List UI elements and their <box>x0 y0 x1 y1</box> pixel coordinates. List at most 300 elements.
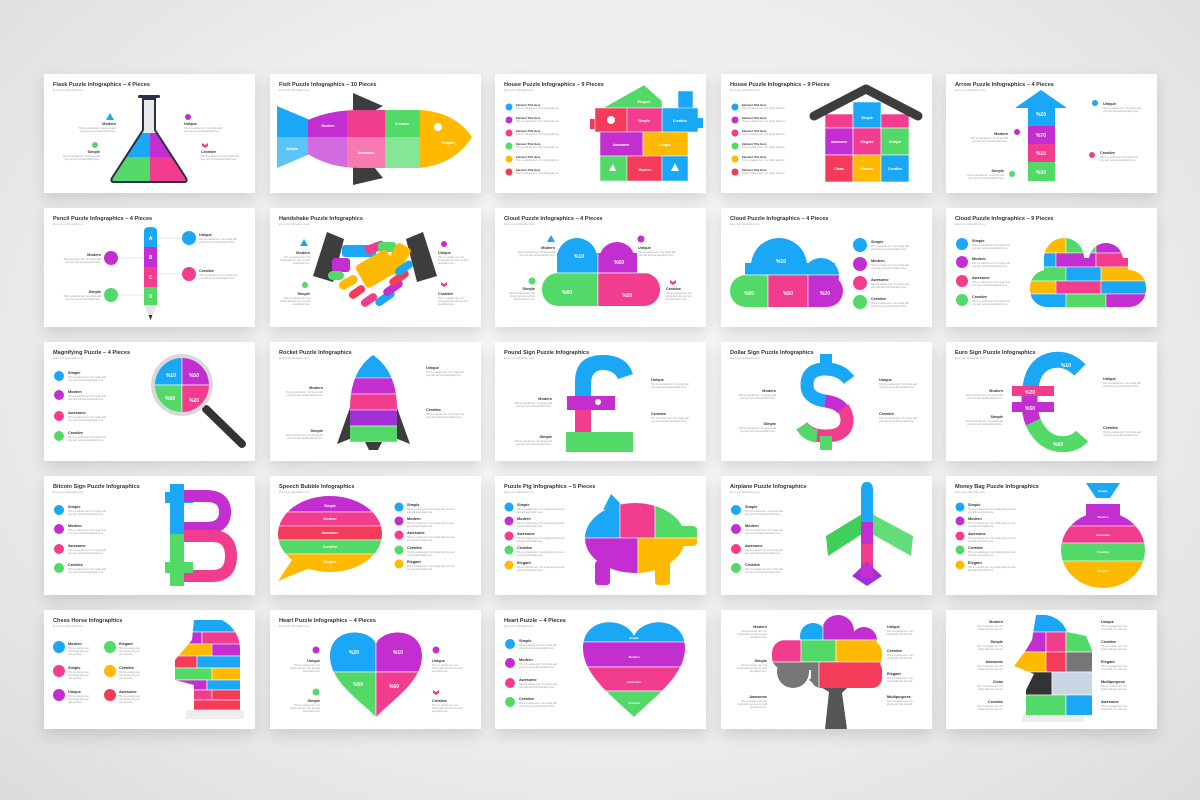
label: unique: This is a sample text. You simply add <box>651 383 689 386</box>
list: Modern <box>68 524 82 528</box>
list: This is a sample text. You simply add your own <box>968 508 1016 511</box>
title <box>504 484 595 494</box>
house grid graphic: Modern <box>861 167 873 171</box>
label: modern: your own text and description here. <box>967 397 1003 400</box>
right labels: simply add your own text <box>887 680 913 683</box>
magnifier graphic: %20 <box>189 398 199 404</box>
list: text and description here. <box>407 554 433 557</box>
list: This is a sample text. <box>68 671 90 674</box>
label: creative <box>1103 426 1141 437</box>
label: modern: your own text and description here. <box>972 140 1008 143</box>
title: Rocket Puzzle Infographics <box>279 350 352 356</box>
title: Enter your subheadline here <box>53 223 84 226</box>
list: This is a sample text. You simply add your own <box>407 522 455 525</box>
pencil graphic: B <box>149 255 153 261</box>
list: This is a sample text. You simply add <box>871 302 909 305</box>
label: modern: your own text and description here. <box>65 261 101 264</box>
list: your own text and description here. <box>871 305 907 308</box>
title <box>279 618 376 628</box>
cloud graphic <box>1030 238 1146 307</box>
checklist: This is a sample text. You simply add your <box>742 107 785 110</box>
label: unique: your own text and description here. <box>638 254 674 257</box>
cloud graphic: %10 <box>776 259 786 265</box>
title: Enter your subheadline here <box>504 491 535 494</box>
left labels: Modern <box>989 620 1004 624</box>
title: Enter your subheadline here <box>730 357 761 360</box>
title <box>279 484 355 494</box>
label: creative <box>879 412 917 423</box>
magnifier graphic <box>151 354 242 444</box>
title: Cloud Puzzle Infographics – 9 Pieces <box>955 216 1054 222</box>
label: creative: your own text and description here. <box>1100 159 1136 162</box>
cloud graphic: %50 <box>783 291 793 297</box>
checklist: Element Title Here <box>742 129 767 133</box>
list: This is a sample text. You simply add <box>871 283 909 286</box>
label: creative <box>432 690 462 713</box>
label: creative <box>438 282 468 306</box>
right labels: simply add your own text <box>887 703 913 706</box>
title: Enter your subheadline here <box>53 491 84 494</box>
checklist: This is a sample text. You simply add your <box>516 159 559 162</box>
list: your own text and description here. <box>68 552 104 555</box>
list: This is a sample text. You simply add your own <box>968 522 1016 525</box>
label: unique: This is a sample text. You simply add <box>1103 382 1141 385</box>
list: text and description here. <box>407 539 433 542</box>
bubble graphic: Simple <box>324 504 336 508</box>
label: modern: This is a sample text. You simply add <box>63 258 102 261</box>
title <box>53 484 140 494</box>
list: This is a sample text. <box>119 647 141 650</box>
money bag graphic: Elegant <box>1098 569 1108 573</box>
label: modern: your own text and description here. <box>287 394 323 397</box>
title <box>504 216 603 226</box>
left labels: This is a sample text. You <box>977 665 1004 668</box>
label: modern: Modern <box>753 625 768 629</box>
list: text and description here. <box>968 554 994 557</box>
title: Enter your subheadline here <box>504 89 535 92</box>
list: Modern <box>68 642 82 646</box>
heart graphic: Simple <box>629 636 639 640</box>
label: simple: This is a sample text. You simply add <box>965 420 1004 423</box>
checklist: This is a sample text. You simply add your <box>516 172 559 175</box>
rocket graphic <box>337 352 410 450</box>
list: This is a sample text. You simply add your own <box>407 536 455 539</box>
list: Modern <box>68 390 82 394</box>
left labels <box>977 620 1004 711</box>
list: This is a sample text. <box>68 647 90 650</box>
fish graphic: Creative <box>395 122 409 126</box>
right labels: Creative <box>1101 640 1116 644</box>
title <box>730 216 829 226</box>
cloud graphic <box>730 238 843 307</box>
label: unique left: description here. <box>303 670 320 673</box>
label: modern: Modern <box>296 251 311 255</box>
list: This is a sample text. You simply add <box>68 549 106 552</box>
pencil graphic <box>118 227 182 320</box>
list: your own text and description here. <box>745 532 781 535</box>
list: You simply add your <box>68 698 89 701</box>
list: Modern <box>972 257 986 261</box>
list: text and description here. <box>407 511 433 514</box>
list: own text here. <box>68 653 83 656</box>
label: creative: This is a sample text. You <box>438 297 465 300</box>
label: unique <box>182 231 237 245</box>
slide: cloud puzzle 4 pieces B <box>721 208 932 327</box>
roof <box>814 89 918 116</box>
right labels: This is a sample text. You <box>1101 685 1128 688</box>
heart graphic: Modern <box>629 655 640 659</box>
slide: airplane <box>721 476 932 595</box>
title: Enter your subheadline here <box>53 357 84 360</box>
list: Modern <box>407 517 421 521</box>
pig graphic <box>585 494 697 585</box>
list: Simple <box>517 503 529 507</box>
title: Arrow Puzzle Infographics – 4 Pieces <box>955 82 1054 88</box>
label: simple: your own text and description here. <box>287 437 323 440</box>
list: You simply add your <box>119 698 140 701</box>
label: simple: simply add your own text and <box>280 300 311 303</box>
list: This is a sample text. <box>68 695 90 698</box>
list: text and description here. <box>968 540 994 543</box>
label: modern <box>514 397 553 408</box>
title <box>955 350 1036 360</box>
title: Enter your subheadline here <box>279 89 310 92</box>
right labels: simply add your own text <box>1101 708 1127 711</box>
slide: magnifying puzzle <box>44 342 255 461</box>
label: simple: This is a sample text. You <box>284 297 311 300</box>
slide: pencil puzzle <box>44 208 255 327</box>
list: Creative <box>119 666 134 670</box>
title <box>955 216 1054 226</box>
list: text and description here. <box>517 540 543 543</box>
label: creative: This is a sample text. You simply add <box>879 417 917 420</box>
list: This is a sample text. You simply add <box>972 262 1010 265</box>
slide: puzzle pig <box>495 476 706 595</box>
left labels: This is a sample text. You <box>977 685 1004 688</box>
list: Simple <box>745 505 757 509</box>
list: text and description here. <box>517 511 543 514</box>
list: You simply add your <box>68 650 89 653</box>
slide: speech bubble <box>270 476 481 595</box>
right labels: This is a sample text. You <box>887 677 914 680</box>
list: This is a sample text. You simply add <box>519 663 557 666</box>
label: modern: Modern <box>102 122 117 126</box>
arrow graphic: %10 <box>1036 151 1046 157</box>
label: modern: Modern <box>762 389 777 393</box>
money bag graphic: Awesome <box>1096 533 1110 537</box>
list: This is a sample text. You simply add <box>972 281 1010 284</box>
slide: cloud puzzle 4 pieces A <box>495 208 706 327</box>
title: Dollar Sign Puzzle Infographics <box>730 350 814 356</box>
list <box>731 505 783 574</box>
list: Creative <box>745 563 760 567</box>
list: This is a sample text. You simply add <box>68 376 106 379</box>
right labels: This is a sample text. You <box>1101 705 1128 708</box>
title <box>279 350 352 360</box>
left labels: simply add your own text <box>978 688 1003 691</box>
label: unique: Unique <box>879 378 892 382</box>
checklist: Element Title Here <box>516 129 541 133</box>
title <box>730 484 806 494</box>
list: Awesome <box>119 690 137 694</box>
list: This is a sample text. You simply add <box>68 529 106 532</box>
list: your own text and description here. <box>745 552 781 555</box>
list: Awesome <box>745 544 763 548</box>
title <box>730 350 814 360</box>
list: your own text and description here. <box>972 303 1008 306</box>
list <box>53 641 141 704</box>
right labels: simply add your own text <box>887 633 913 636</box>
label: creative: your own text and description here. <box>1103 434 1139 437</box>
title: Enter your subheadline here <box>279 491 310 494</box>
label: simple <box>285 429 324 440</box>
label: modern: your own text and description here. <box>519 254 555 257</box>
list: your own text and description here. <box>519 647 555 650</box>
pound graphic <box>566 355 633 452</box>
list: This is a sample text. <box>119 671 141 674</box>
list: Simple <box>972 239 984 243</box>
label: modern: This is a sample text. You simply add <box>738 394 777 397</box>
checklist: This is a sample text. You simply add your <box>516 107 559 110</box>
checklist: This is a sample text. You simply add your <box>742 120 785 123</box>
heart graphic: %10 <box>393 650 403 656</box>
title: Handshake Puzzle Infographics <box>279 216 363 222</box>
list: Modern <box>745 524 759 528</box>
bubble graphic <box>275 494 385 581</box>
label: unique: This is a sample text. You simply add <box>638 251 676 254</box>
list: This is a sample text. You simply add your own <box>407 565 455 568</box>
heart graphic: Creative <box>628 701 640 705</box>
label: unique left: Unique <box>307 659 320 663</box>
checklist: This is a sample text. You simply add your <box>742 159 785 162</box>
title: Enter your subheadline here <box>279 357 310 360</box>
list: own text here. <box>68 701 83 704</box>
title: Enter your subheadline here <box>955 357 986 360</box>
left labels: simply add your own text <box>978 648 1003 651</box>
pencil graphic: D <box>149 294 153 300</box>
label: unique: your own text and description here. <box>1103 385 1139 388</box>
money bag graphic: Simple <box>1098 489 1108 493</box>
label: modern <box>970 129 1020 143</box>
label: creative <box>426 408 464 419</box>
title: Enter your subheadline here <box>279 223 310 226</box>
list: This is a sample text. You simply add <box>68 568 106 571</box>
right labels: Unique <box>887 625 900 629</box>
label: unique <box>438 241 468 265</box>
label: simple: This is a sample text. You simply add <box>514 440 553 443</box>
list: This is a sample text. You simply add <box>745 568 783 571</box>
list: your own text and description here. <box>972 247 1008 250</box>
title: Heart Puzzle Infographics – 4 Pieces <box>279 618 376 624</box>
flask graphic <box>110 95 188 183</box>
magnifier graphic: %10 <box>166 373 176 379</box>
label: creative: This is a sample text. You simply add <box>651 417 689 420</box>
label: unique: Unique <box>438 251 451 255</box>
list: Elegant <box>517 561 531 565</box>
list: your own text and description here. <box>519 666 555 669</box>
list: Awesome <box>968 532 986 536</box>
slide: heart puzzle 4 pieces <box>270 610 481 729</box>
label: creative: your own text and description here. <box>201 158 237 161</box>
house grid graphic: Clean <box>834 167 844 171</box>
label: simple: Simple <box>298 292 310 296</box>
list: your own text and description here. <box>871 248 907 251</box>
list: text and description here. <box>407 525 433 528</box>
label: unique: This is a sample text. You simply add <box>199 238 237 241</box>
right labels: simply add your own text <box>1101 628 1127 631</box>
house grid graphic: Simple <box>861 116 873 120</box>
label: modern: This is a sample text. You simply add <box>517 251 556 254</box>
list: your own text and description here. <box>68 439 104 442</box>
fish graphic: Simple <box>286 147 298 151</box>
label: simple: Simple <box>88 150 100 154</box>
slide: bitcoin sign <box>44 476 255 595</box>
list: Simple <box>968 503 980 507</box>
label: creative <box>201 143 239 161</box>
left labels: Clean <box>993 680 1004 684</box>
title: Enter your subheadline here <box>504 625 535 628</box>
bitcoin graphic <box>165 484 231 586</box>
label: simple: description here. <box>750 670 767 673</box>
list: This is a sample text. You simply add <box>519 644 557 647</box>
checklist: This is a sample text. You simply add your <box>516 146 559 149</box>
list: Simple <box>68 371 80 375</box>
list: This is a sample text. You simply add your own <box>968 551 1016 554</box>
label: unique: your own text and description here. <box>184 130 220 133</box>
label: simple: and description here. <box>514 298 535 301</box>
label: creative: and description here. <box>666 298 688 301</box>
right labels: simply add your own text <box>1101 648 1127 651</box>
label: unique left: simply add your own text and <box>290 667 321 670</box>
title: Enter your subheadline here <box>955 223 986 226</box>
label: simple <box>737 659 768 673</box>
list: your own text and description here. <box>972 284 1008 287</box>
list: This is a sample text. You simply add your own <box>407 551 455 554</box>
title: Enter your subheadline here <box>53 625 84 628</box>
title <box>53 82 150 92</box>
list: Awesome <box>68 411 86 415</box>
right labels: Unique <box>1101 620 1114 624</box>
bubble graphic: Awesome <box>322 531 338 535</box>
list: This is a sample text. <box>119 695 141 698</box>
list: Unique <box>68 690 81 694</box>
label: unique right: Unique <box>432 659 445 663</box>
list: This is a sample text. You simply add your own <box>517 551 565 554</box>
label: unique: simply add your own text and <box>438 259 468 262</box>
label: unique: description here. <box>438 262 455 265</box>
heart graphic: %60 <box>389 684 399 690</box>
title: Money Bag Puzzle Infographics <box>955 484 1039 490</box>
list <box>956 238 1010 306</box>
house labels: Elegant <box>638 100 651 104</box>
left labels: simply add your own text <box>978 628 1003 631</box>
title: Puzzle Pig Infographics – 5 Pieces <box>504 484 595 490</box>
title <box>53 618 122 628</box>
slide: heart puzzle bands <box>495 610 706 729</box>
label: unique right: simply add your own text and <box>432 667 462 670</box>
list: Elegant <box>407 560 421 564</box>
title: Enter your subheadline here <box>53 89 84 92</box>
label: unique: This is a sample text. You <box>438 256 465 259</box>
list: Awesome <box>519 678 537 682</box>
label: unique <box>638 236 676 257</box>
list: your own text and description here. <box>68 532 104 535</box>
right labels: Multipurpose <box>1101 680 1125 684</box>
label: unique: Unique <box>199 233 212 237</box>
dollar graphic <box>802 354 849 450</box>
list <box>394 502 455 571</box>
bubble graphic: Modern <box>324 517 336 521</box>
house grid graphic: Unique <box>889 140 901 144</box>
euro graphic: %10 <box>1061 363 1071 369</box>
label: creative: This is a sample text. You simply add <box>199 274 237 277</box>
list: This is a sample text. You simply add your own <box>517 537 565 540</box>
label: modern <box>280 239 311 265</box>
checklist: Element Title Here <box>742 155 767 159</box>
euro graphic: %60 <box>1053 442 1063 448</box>
label: creative: your own text and description here. <box>199 277 235 280</box>
arrow graphic <box>1015 90 1067 181</box>
label: simple <box>280 282 311 306</box>
label: unique: your own text and description here. <box>879 386 915 389</box>
label: creative: Creative <box>1100 151 1115 155</box>
list <box>853 238 909 309</box>
label: unique left <box>290 646 321 673</box>
label: unique <box>184 114 222 133</box>
label: modern: This is a sample text. You simply add <box>514 402 553 405</box>
title <box>955 484 1039 494</box>
list: your own text and description here. <box>519 705 555 708</box>
label: simple: description here. <box>303 710 320 713</box>
list <box>54 371 106 442</box>
title: Chess Horse Infographics <box>53 618 122 624</box>
label: awesome: description here. <box>750 706 767 709</box>
label: modern: your own text and description here. <box>516 405 552 408</box>
house labels <box>607 100 687 172</box>
checklist: This is a sample text. You simply add your <box>742 146 785 149</box>
label: simple: Simple <box>755 659 767 663</box>
list: Simple <box>68 505 80 509</box>
title <box>955 82 1054 92</box>
slide: cloud puzzle 9 pieces <box>946 208 1157 327</box>
label: simple: Simple <box>308 699 320 703</box>
checklist: This is a sample text. You simply add your <box>516 120 559 123</box>
list: Awesome <box>972 276 990 280</box>
slide: handshake puzzle <box>270 208 481 327</box>
label: awesome: This is a sample text. You <box>741 700 768 703</box>
label: unique <box>1092 100 1141 113</box>
title: Pound Sign Puzzle Infographics <box>504 350 589 356</box>
label: unique left: This is a sample text. You <box>294 664 321 667</box>
slide: euro sign <box>946 342 1157 461</box>
label: modern <box>63 251 118 265</box>
label: simple <box>966 169 1015 180</box>
label: creative: your own text and description here. <box>426 416 462 419</box>
checklist: Element Title Here <box>742 103 767 107</box>
label: simple <box>965 415 1004 426</box>
tree graphic <box>769 612 886 729</box>
list: Modern <box>968 517 982 521</box>
left labels: simply add your own text <box>978 668 1003 671</box>
label: modern <box>965 389 1004 400</box>
list: text and description here. <box>968 525 994 528</box>
label: creative: simply add your own text <box>666 295 692 298</box>
label: unique <box>651 378 689 389</box>
title <box>53 350 130 360</box>
money bag graphic: Creative <box>1097 550 1109 554</box>
list: Simple <box>519 639 531 643</box>
checklist: This is a sample text. You simply add your <box>742 133 785 136</box>
